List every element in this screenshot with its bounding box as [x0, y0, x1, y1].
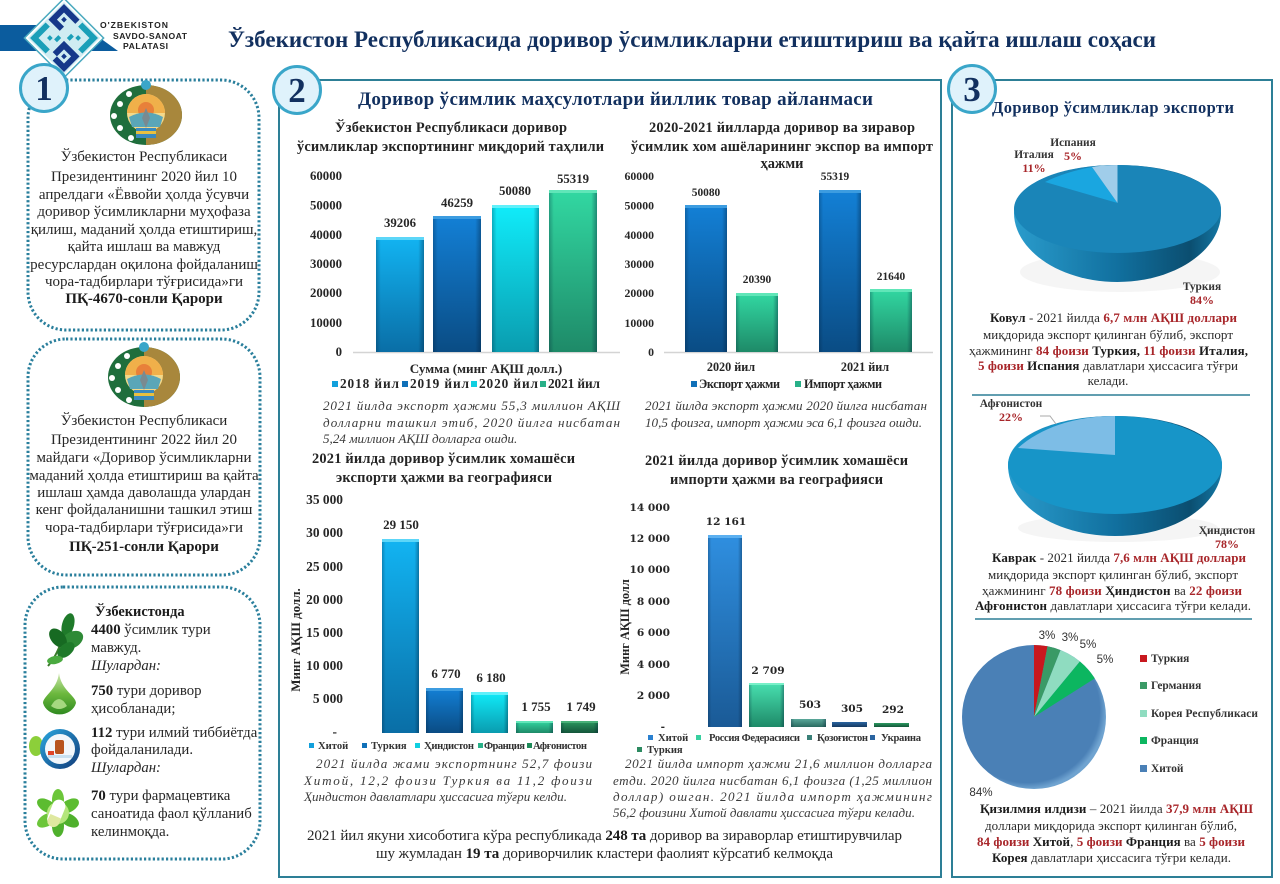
logo band [0, 25, 118, 51]
chart title: экспорти ҳажми ва географияси [336, 470, 552, 486]
category labels: 2021 йил [841, 360, 889, 374]
text: plant counts: Шулардан: [90, 760, 161, 776]
legend [309, 741, 587, 752]
y axis: 30000 [310, 257, 342, 271]
summary text: 2021 йил якуни хисоботига кўра республикада 248 та доривор ва зираворлар етиштирувчилар [307, 828, 902, 844]
panel: decree 1 [28, 80, 259, 330]
text: plant counts: Ўзбекистонда [95, 603, 185, 620]
y axis: 15 000 [306, 625, 343, 640]
pie labels: Афғонистон [980, 398, 1043, 410]
text: licorice root: Қизилмия илдизи – 2021 йилда 37,9 млн АҚШ [980, 801, 1254, 816]
y axis: Минг АҚШ долл. [288, 588, 303, 692]
text: plant counts: ҳисобланади; [91, 701, 175, 717]
pie labels [1014, 137, 1221, 307]
legend: Туркия [647, 745, 683, 756]
text: plant counts: 750 тури доривор [91, 683, 202, 699]
note: етди. 2020 йилга нисбатан 6,1 фоизга (1,25 миллион [613, 773, 932, 788]
text: plant counts: Шулардан: [90, 658, 161, 674]
note: Ҳиндистон давлатлари ҳиссасига тўғри келди. [303, 789, 567, 804]
bars [376, 190, 597, 352]
chart title [312, 451, 575, 486]
bars [708, 535, 909, 727]
text: plant counts: мавжуд. [91, 640, 141, 656]
chart title: 2020-2021 йилларда доривор ва зиравор [649, 120, 915, 136]
text: plant counts: 70 тури фармацевтика [91, 788, 231, 804]
badge: number 1 [20, 64, 68, 112]
text: licorice root: 84 фоизи Хитой, 5 фоизи Франция ва 5 фоизи [977, 834, 1246, 849]
value labels: 2 709 [751, 665, 785, 677]
value labels: 55319 [557, 172, 589, 186]
y axis: 40000 [310, 228, 342, 242]
y axis [288, 492, 343, 739]
text: decree PK-4670: ПҚ-4670-сонли Қарори [65, 291, 223, 307]
chart title: импорти ҳажми ва географияси [670, 472, 883, 488]
chart title: 2021 йилда доривор ўсимлик хомашёси [645, 453, 908, 469]
value labels: 55319 [821, 171, 850, 183]
text: decree PK-251 [29, 412, 259, 555]
y axis: 30000 [624, 257, 654, 271]
text: kovul: Ковул - 2021 йилда 6,7 млн АҚШ доллари [990, 310, 1238, 325]
text: kavrak: миқдорида экспорт қилинган бўлиб, экспорт [988, 567, 1238, 582]
y axis: 4 000 [637, 659, 670, 671]
legend: Экспорт ҳажми [699, 377, 780, 391]
y axis: 5 000 [313, 691, 343, 706]
value labels: 1 755 [521, 699, 551, 714]
pie labels: Италия [1014, 149, 1054, 161]
chart title: ўсимлик хом ашёларининг экспор ва импорт [631, 139, 933, 155]
value labels: 503 [799, 699, 821, 711]
legend: Хитой [318, 741, 348, 752]
badge: number 2 [274, 66, 320, 114]
pie labels: Туркия [1183, 281, 1221, 293]
y axis: 10 000 [629, 564, 670, 576]
note: 2021 йилда импорт ҳажми 21,6 миллион долларга [625, 756, 932, 771]
chart title [645, 453, 908, 488]
legend: 2019 йил [410, 376, 470, 391]
note [645, 398, 928, 430]
y axis [310, 169, 620, 359]
pie chart: licorice root [962, 629, 1258, 799]
note: 10,5 фоизга, импорт ҳажми эса 6,1 фоизга ошди. [645, 415, 922, 430]
text: plant counts: фойдаланилади. [91, 742, 193, 758]
bar chart: export geography [288, 451, 598, 804]
pie labels: 78% [1215, 537, 1239, 551]
legend: Хитой [658, 733, 688, 744]
legend [637, 733, 922, 756]
y axis: 10000 [624, 316, 654, 330]
y axis: 60000 [624, 169, 654, 183]
pie labels: 5% [1064, 149, 1082, 163]
y axis: - [661, 721, 665, 733]
value labels: 292 [882, 704, 904, 716]
y axis: Минг АҚШ долл [618, 579, 632, 675]
text: plant counts: 4400 ўсимлик тури [91, 622, 211, 638]
legend: Украина [881, 733, 922, 744]
pie labels [980, 398, 1256, 551]
percent labels: 3% [1062, 631, 1078, 644]
logo diamond [24, 0, 104, 78]
legend: 2021 йил [548, 376, 601, 391]
text: decree PK-4670: қайта ишлаш ва мавжуд [68, 239, 221, 255]
icon: leaf branch [46, 612, 86, 666]
text: kavrak: Каврак - 2021 йилда 7,6 млн АҚШ доллари [992, 550, 1246, 565]
pie labels: Испания [1050, 137, 1096, 149]
note: 56,2 фоизини Хитой давлати ҳиссасига тўғри келади. [613, 805, 915, 820]
icon: state emblem [110, 80, 182, 145]
pie labels: 22% [999, 410, 1023, 424]
value labels: 50080 [499, 184, 531, 198]
text: decree PK-4670: апрелдаги «Ёввойи ҳолда ўсувчи [39, 186, 249, 203]
legend: 2018 йил [340, 376, 400, 391]
note: 2021 йилда жами экспортнинг 52,7 фоизи [316, 756, 592, 771]
logo text: SAVDO-SANOAT [113, 31, 188, 41]
pie labels: Ҳиндистон [1199, 525, 1256, 537]
value labels: 20390 [743, 274, 772, 286]
percent labels: 84% [969, 786, 993, 799]
logo text: PALATASI [123, 41, 168, 51]
legend: Қозоғистон [817, 733, 868, 744]
y axis: 8 000 [637, 596, 670, 608]
text: decree PK-4670: чора-тадбирлари тўғрисида»ги [45, 274, 243, 290]
text: decree PK-251: Президентининг 2022 йил 20 [51, 432, 237, 448]
legend [1140, 653, 1258, 775]
legend: Корея Республикаси [1151, 708, 1258, 720]
legend [691, 377, 882, 391]
chart title: ўсимликлар экспортининг миқдорий таҳлили [297, 139, 604, 155]
chart title [297, 119, 604, 155]
legend: Франция [1151, 735, 1199, 747]
bar chart: import geography [613, 453, 932, 820]
y axis: 0 [648, 345, 654, 359]
legend: 2020 йил [479, 376, 539, 391]
note: 2021 йилда экспорт ҳажми 55,3 миллион АҚШ [323, 398, 621, 413]
value labels: 46259 [441, 196, 473, 210]
y axis: 40000 [624, 228, 654, 242]
percent labels: 3% [1039, 629, 1055, 642]
chart title: Ўзбекистон Республикаси доривор [335, 119, 567, 136]
text: decree PK-4670: Президентининг 2020 йил 10 [51, 169, 237, 185]
value labels: 6 770 [431, 666, 461, 681]
text: kovul: 5 фоизи Испания давлатлари ҳиссасига тўғри [978, 358, 1238, 373]
value labels [383, 517, 596, 714]
badge: number 3: 3 [963, 70, 981, 109]
text: decree PK-4670 [30, 148, 258, 307]
legend: Германия [1151, 680, 1201, 692]
text: decree PK-4670: ресурслардан оқилона фойдаланиш [30, 257, 258, 273]
text: kavrak: ҳажмининг 78 фоизи Ҳиндистон ва 22 фоизи [982, 583, 1242, 598]
y axis: 30 000 [306, 525, 343, 540]
y axis: 0 [336, 345, 342, 359]
text: licorice root [977, 801, 1254, 865]
y axis [624, 169, 933, 359]
note: долларни ташкил этиб, 2020 йилга нисбатан [323, 415, 620, 430]
text: decree PK-4670: қилиш, маданий ҳолда етиштириш, [31, 222, 257, 238]
y axis: 20 000 [306, 592, 343, 607]
slice: Spain [1092, 165, 1118, 203]
text: kovul: миқдорида экспорт қилинган бўлиб, экспорт [983, 327, 1233, 342]
text: decree PK-251: Ўзбекистон Республикаси [61, 412, 227, 429]
legend: Туркия [371, 741, 407, 752]
note: Хитой, 12,2 фоизи Туркия ва 11,2 фоизи [303, 773, 592, 788]
pie chart: kovul [1014, 137, 1221, 307]
value labels: 21640 [877, 271, 906, 283]
text: kovul: келади. [1088, 373, 1128, 388]
bar chart: export and import [624, 120, 933, 430]
text: kavrak [975, 550, 1251, 613]
note [303, 756, 592, 804]
y axis: 6 000 [637, 627, 670, 639]
legend: Импорт ҳажми [804, 377, 882, 391]
y axis: 10 000 [306, 658, 343, 673]
y axis: 20000 [624, 286, 654, 300]
axis title: Сумма (минг АҚШ долл.) [410, 361, 562, 376]
leader line [1040, 416, 1056, 424]
icon: green drop [43, 673, 76, 714]
value labels [384, 172, 589, 230]
note [613, 756, 932, 820]
value labels: 29 150 [383, 517, 419, 532]
icon: capsule with leaves [34, 789, 82, 837]
legend [332, 376, 601, 391]
value labels: 305 [841, 703, 863, 715]
text: decree PK-251: кенг фойдаланишни ташкил этиш [36, 502, 253, 518]
text: decree PK-4670: доривор ўсимликларни муҳофаза [37, 204, 251, 220]
panel: plant statistics [25, 587, 260, 859]
value labels: 6 180 [476, 670, 506, 685]
text: kovul: ҳажмининг 84 фоизи Туркия, 11 фоизи Италия, [969, 343, 1248, 358]
legend: Афғонистон [533, 741, 587, 752]
legend: Ҳиндистон [424, 741, 474, 752]
text: plant counts [90, 603, 258, 840]
y axis [618, 502, 670, 733]
value labels [692, 171, 906, 286]
value labels: 1 749 [566, 699, 596, 714]
text: decree PK-251: майдаги «Доривор ўсимликларни [37, 450, 251, 466]
badge: number 1: 1 [35, 69, 53, 108]
panel: annual turnover [279, 80, 941, 877]
text: decree PK-251: чора-тадбирлари тўғрисида»ги [45, 520, 243, 536]
y axis: 2 000 [637, 690, 670, 702]
badge: number 3 [948, 66, 996, 112]
note [323, 398, 621, 446]
text: decree PK-251: ишлаш ҳамда даволашда улардан [37, 485, 251, 501]
text: kovul [969, 310, 1248, 388]
value labels: 50080 [692, 187, 721, 199]
y axis: - [333, 724, 337, 739]
y axis: 35 000 [306, 492, 343, 507]
value labels: 39206 [384, 216, 417, 230]
text: decree PK-4670: Ўзбекистон Республикаси [61, 148, 227, 165]
category labels [707, 360, 889, 374]
note: 5,24 миллион АҚШ долларга ошди. [323, 431, 517, 446]
pie labels: 84% [1190, 293, 1214, 307]
y axis: 60000 [310, 169, 342, 183]
percent labels: 5% [1097, 653, 1113, 666]
y axis: 12 000 [629, 533, 670, 545]
panel heading: Доривор ўсимликлар экспорти [992, 98, 1234, 117]
icon: medicine circle [29, 729, 80, 769]
y axis: 20000 [310, 286, 342, 300]
y axis: 14 000 [629, 502, 670, 514]
panel: decree 2 [28, 339, 260, 575]
legend: Франция [484, 741, 525, 752]
note: 2021 йилда экспорт ҳажми 2020 йилга нисбатан [645, 398, 928, 413]
chart title: ҳажми [761, 156, 803, 172]
y axis: 25 000 [306, 559, 343, 574]
pie chart: kavrak [980, 398, 1256, 551]
summary text [307, 828, 902, 862]
value labels [706, 516, 904, 716]
legend: Туркия [1151, 653, 1189, 665]
text: decree PK-251: маданий ҳолда етиштириш ва қайта [29, 468, 259, 484]
header banner and logo [0, 0, 188, 78]
bars [382, 539, 598, 733]
text: licorice root: доллари миқдорида экспорт қилинган бўлиб, [985, 818, 1237, 833]
panel: plant exports [952, 80, 1272, 877]
chart title [631, 120, 933, 172]
text: plant counts: 112 тури илмий тиббиётда [91, 725, 258, 741]
main title: Ўзбекистон Республикасида доривор ўсимликларни етиштириш ва қайта ишлаш соҳаси [228, 27, 1156, 52]
percent labels: 5% [1080, 638, 1096, 651]
icon: state emblem [108, 342, 180, 407]
legend: Хитой [1151, 763, 1184, 775]
bar chart: export by year [297, 119, 621, 446]
logo text: O'ZBEKISTON [100, 20, 168, 30]
text: licorice root: Корея давлатлари ҳиссасига тўғри келади. [992, 850, 1231, 865]
value labels: 12 161 [706, 516, 746, 528]
y axis: 50000 [624, 198, 654, 212]
slice: Italy [1045, 167, 1118, 203]
pie labels: 11% [1022, 161, 1046, 175]
note: доллар) ошган. 2021 йилда импорт ҳажмининг [613, 789, 932, 804]
bars [685, 190, 912, 352]
legend: Россия Федерасияси [709, 733, 800, 744]
text: decree PK-251: ПҚ-251-сонли Қарори [69, 539, 219, 555]
category labels: 2020 йил [707, 360, 755, 374]
percent labels [969, 629, 1113, 799]
logo text [100, 20, 188, 51]
panel heading: Доривор ўсимлик маҳсулотлари йиллик товар айланмаси [358, 89, 873, 110]
text: plant counts: келинмоқда. [91, 824, 169, 840]
y axis: 50000 [310, 198, 342, 212]
summary text: шу жумладан 19 та дориворчилик кластери фаолият кўрсатиб келмоқда [376, 846, 833, 862]
slices [1034, 645, 1095, 717]
text: plant counts: саноатида фаол қўлланиб [91, 806, 252, 822]
badge: number 2: 2 [288, 71, 306, 110]
slice: Afghanistan [1018, 416, 1115, 455]
y axis: 10000 [310, 316, 342, 330]
chart title: 2021 йилда доривор ўсимлик хомашёси [312, 451, 575, 467]
text: kavrak: Афғонистон давлатлари ҳиссасига тўғри келади. [975, 598, 1251, 613]
